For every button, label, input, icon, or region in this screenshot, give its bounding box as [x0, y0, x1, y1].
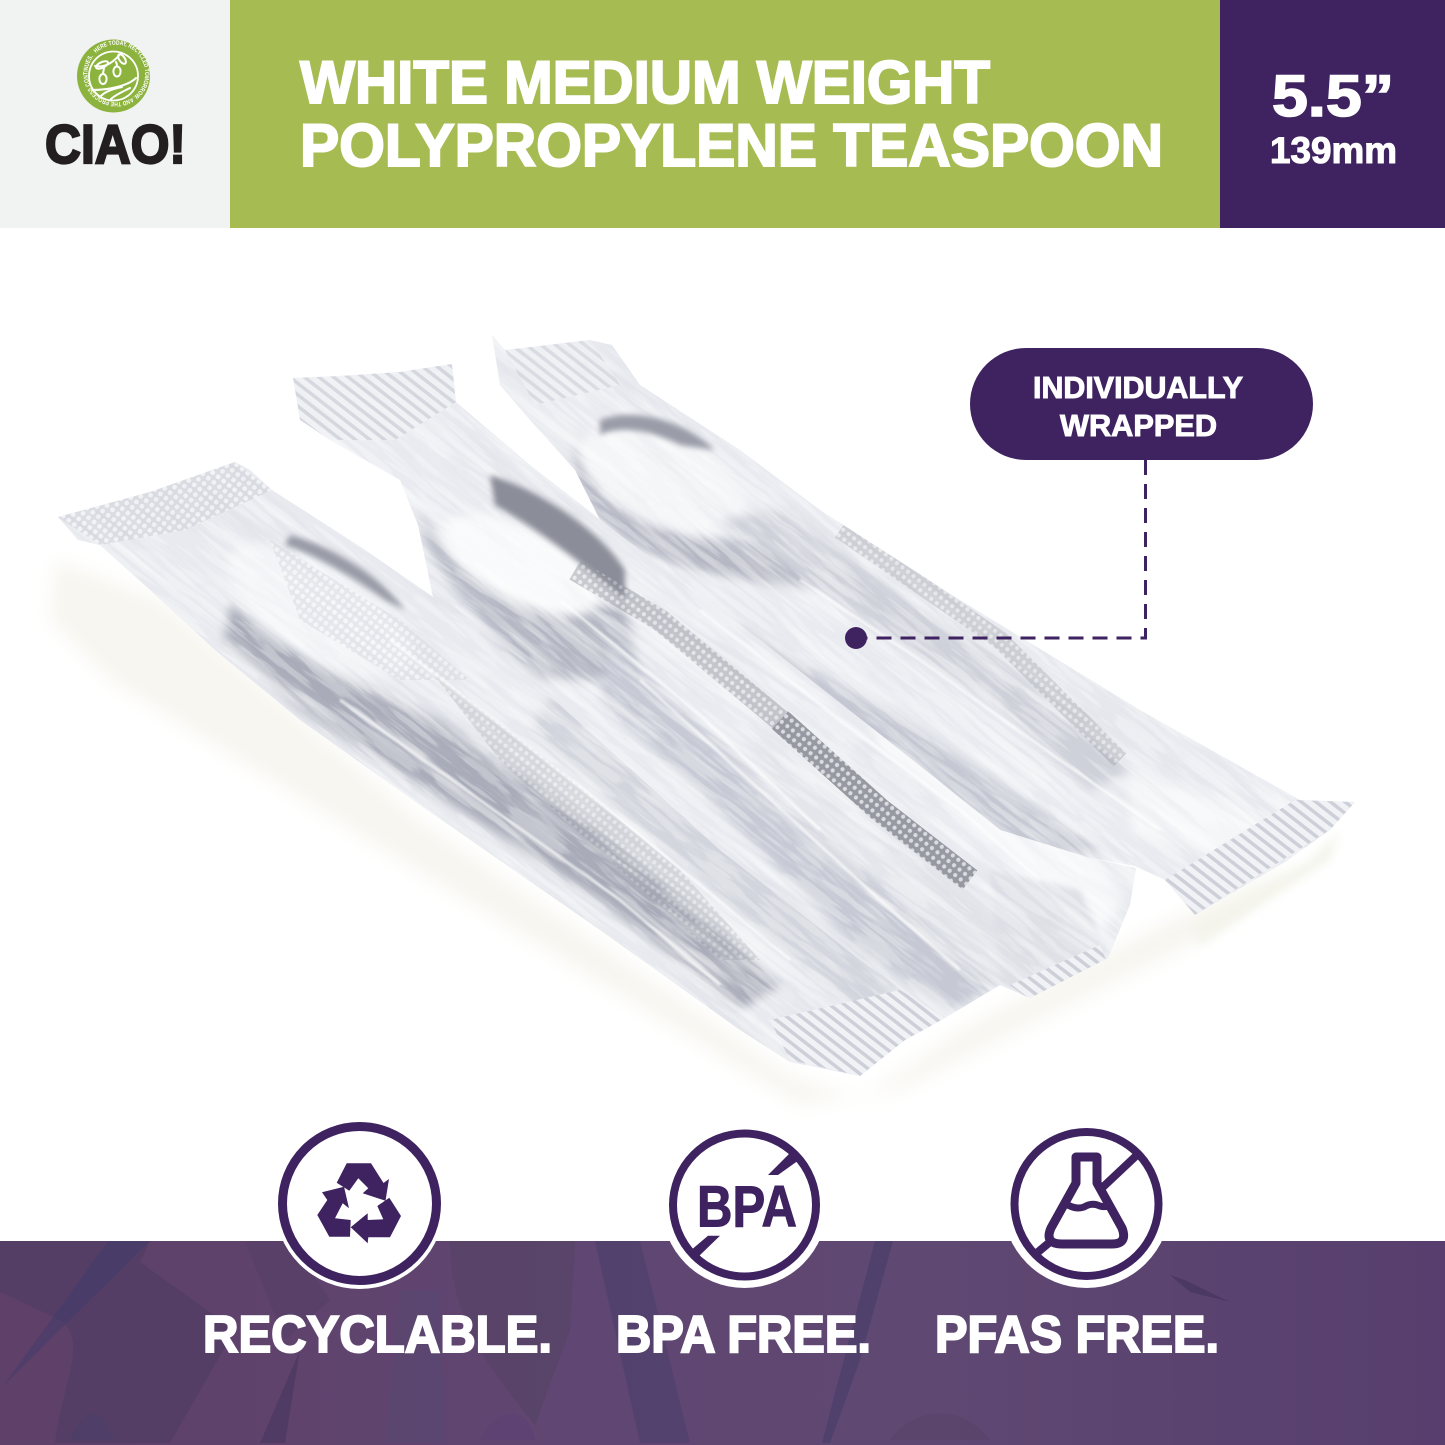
- bottom band with leaf backdrop: [0, 1241, 1445, 1445]
- header panel: title: [230, 0, 1220, 228]
- callout: individually wrapped: [845, 348, 1313, 649]
- labels: [203, 1306, 1219, 1364]
- icon: CIAO logo badge: HERE TODAY, RECYCLED TOMORROW. AND THE PROCESS CONTINUES.: [83, 40, 150, 106]
- title: [300, 49, 1163, 179]
- title: POLYPROPYLENE TEASPOON: [300, 112, 1163, 179]
- spoon details and end seals: [58, 340, 1355, 1076]
- logo wordmark: CIAO!: [45, 113, 186, 175]
- right wrapper: [492, 336, 1350, 912]
- pill label: INDIVIDUALLY: [1033, 370, 1243, 405]
- pill label: WRAPPED: [1060, 408, 1217, 443]
- title: WHITE MEDIUM WEIGHT: [300, 49, 990, 116]
- label: recyclable: RECYCLABLE.: [203, 1306, 552, 1364]
- plastic film crinkle streaks: [112, 338, 1320, 1066]
- leader line: [845, 460, 1146, 649]
- left wrapper: [40, 450, 960, 1090]
- soft cast shadow: [50, 560, 1300, 1105]
- icon: BPA free: [662, 1122, 828, 1288]
- icon: recyclable: [274, 1119, 444, 1289]
- icon: PFAS free: [1002, 1120, 1170, 1288]
- header panel: size: [1220, 0, 1445, 228]
- label: PFAS free: PFAS FREE.: [935, 1306, 1219, 1364]
- soft seal shadows: [1190, 830, 1340, 945]
- size in millimetres: 139mm: [1270, 130, 1397, 171]
- icon: BPA free: BPA: [697, 1174, 797, 1240]
- film wrinkles: [340, 580, 1160, 985]
- middle wrapper: [280, 350, 1150, 1030]
- size in inches: 5.5”: [1272, 64, 1394, 129]
- label: BPA free: BPA FREE.: [616, 1306, 871, 1364]
- pill label: [970, 348, 1313, 460]
- header panel: logo: [0, 0, 230, 228]
- product photo: three wrapped spoons: [52, 336, 1355, 1102]
